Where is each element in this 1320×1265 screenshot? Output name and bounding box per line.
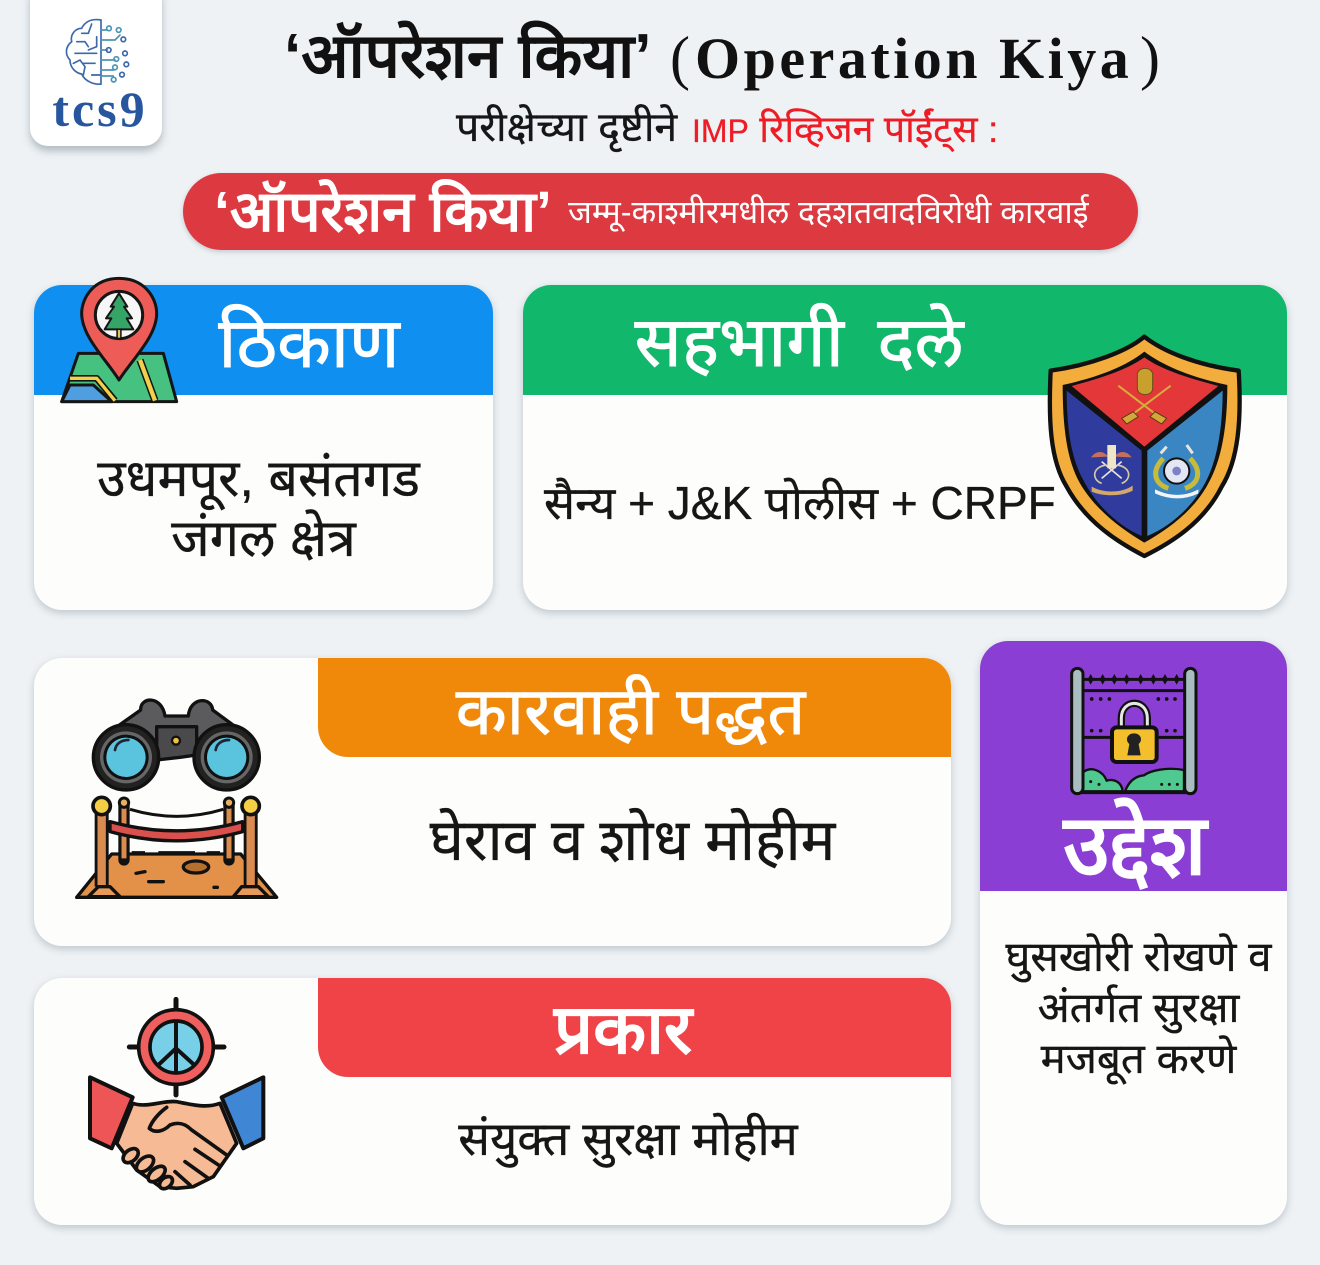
- forces text: सैन्य + J&K पोलीस + CRPF: [544, 477, 1056, 529]
- objective text: अंतर्गत सुरक्षा: [1038, 984, 1239, 1031]
- objective heading: उद्देश: [1063, 798, 1207, 892]
- panel: method: [34, 658, 951, 946]
- objective text: [1005, 933, 1272, 1085]
- objective text: मजबूत करणे: [1041, 1035, 1236, 1082]
- banner pill: [183, 173, 1138, 250]
- police emblem: [1091, 445, 1133, 495]
- icon: shield: [1048, 334, 1242, 558]
- icon: binoculars and cordon: [75, 698, 278, 899]
- title closing bracket: ): [1140, 25, 1160, 91]
- forces header band: [523, 285, 1287, 395]
- subtitle: [456, 104, 998, 152]
- location header band: [34, 285, 493, 395]
- icon: handshake and peace target: [88, 996, 266, 1191]
- location text: उधमपूर, बसंतगड: [97, 450, 420, 508]
- type header band: [318, 978, 951, 1077]
- panel: forces: [523, 285, 1287, 610]
- logo text: tcs9: [52, 81, 148, 137]
- location text: जंगल क्षेत्र: [171, 510, 356, 568]
- method text: घेराव व शोध मोहीम: [430, 808, 835, 873]
- panel: objective: [980, 641, 1287, 1225]
- title: [284, 20, 1160, 91]
- icon: map pin: [60, 276, 178, 404]
- objective header band: [980, 641, 1287, 891]
- objective text: घुसखोरी रोखणे व: [1006, 933, 1271, 980]
- CRPF emblem: [1155, 445, 1198, 498]
- panel: type: [34, 978, 951, 1225]
- banner heading: ‘ऑपरेशन किया’: [214, 180, 552, 244]
- type text: संयुक्त सुरक्षा मोहीम: [458, 1112, 798, 1165]
- title opening bracket: (: [670, 25, 690, 91]
- method header band: [318, 658, 951, 757]
- logo card: [30, 0, 162, 146]
- method heading: कारवाही पद्धत: [456, 675, 805, 749]
- army emblem: [1118, 368, 1171, 424]
- title Latin part: Operation Kiya: [695, 26, 1132, 91]
- title Marathi part: ‘ऑपरेशन किया’: [284, 22, 651, 91]
- panel: location: [34, 285, 493, 610]
- banner subheading: जम्मू-काश्मीरमधील दहशतवादविरोधी कारवाई: [568, 194, 1089, 230]
- location heading: ठिकाण: [218, 304, 400, 382]
- subtitle black part: परीक्षेच्या दृष्टीने: [456, 104, 677, 150]
- subtitle red part: IMP रिव्हिजन पॉईंट्स :: [692, 108, 998, 150]
- type heading: प्रकार: [554, 991, 692, 1068]
- icon: brain circuit: [66, 18, 130, 85]
- forces heading: सहभागी दले: [635, 303, 963, 381]
- location text: [96, 450, 421, 568]
- icon: fence and padlock: [1070, 666, 1198, 796]
